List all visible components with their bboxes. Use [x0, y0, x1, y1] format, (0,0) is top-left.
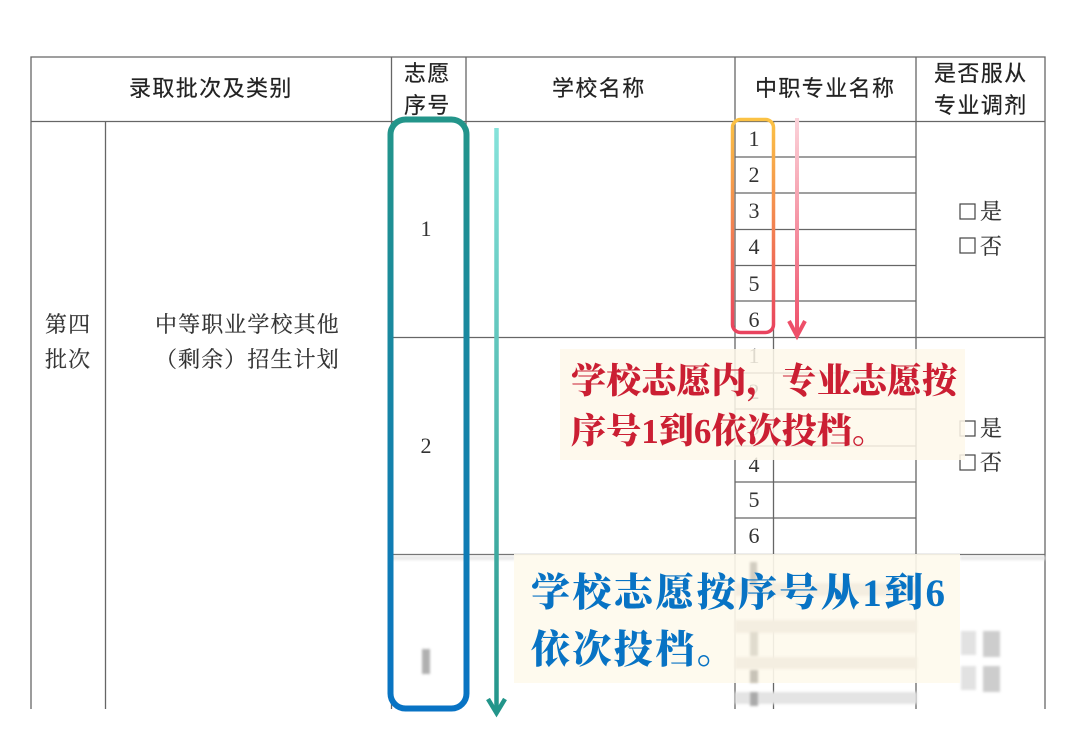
major numbers, school 2: 5 — [748, 487, 760, 512]
major numbers, school 2: 4 — [748, 452, 760, 477]
batch label: 批次 — [45, 347, 91, 372]
batch label: 第四 — [45, 312, 91, 337]
header: accept major adjustment: 专业调剂 — [934, 93, 1028, 118]
major numbers, school 1: 1 — [748, 126, 760, 151]
major numbers, school 2: 6 — [748, 523, 760, 548]
major numbers, school 1: 6 — [748, 307, 760, 332]
header: admission batch and category: 录取批次及类别 — [129, 76, 293, 101]
adjustment checkboxes, school 1 — [960, 199, 1002, 259]
faded table bands behind callout — [735, 562, 917, 683]
callout: school preference order — [514, 554, 960, 683]
major numbers, school 1: 2 — [748, 162, 760, 187]
header: vocational major name: 中职专业名称 — [755, 76, 895, 101]
header: school name: 学校名称 — [552, 76, 646, 101]
category label: （剩余）招生计划 — [155, 347, 340, 372]
major numbers, school 1: 3 — [748, 198, 760, 223]
blurred lower table rows — [391, 556, 1045, 706]
header: accept major adjustment: 是否服从 — [934, 61, 1028, 86]
header: preference number: 序号 — [404, 93, 451, 118]
arrow: school order — [488, 128, 505, 713]
header: accept major adjustment — [934, 61, 1028, 118]
callout: school preference order: 学校志愿按序号从1到6 — [531, 572, 947, 615]
adjustment checkboxes, school 1: 是 — [980, 199, 1002, 224]
school preference numbers: 2 — [420, 433, 432, 458]
school preference numbers: 1 — [420, 216, 432, 241]
major numbers, school 2: 3 — [748, 415, 760, 440]
major numbers, school 1: 5 — [748, 271, 760, 296]
header: preference number: 志愿 — [404, 61, 451, 86]
major numbers, school 2 — [748, 343, 760, 548]
adjustment checkboxes, school 1: 否 — [980, 234, 1002, 259]
callout: major preference order: 序号1到6依次投档。 — [571, 412, 887, 451]
school preference numbers — [420, 216, 432, 458]
callout: school preference order: 依次投档。 — [531, 629, 738, 672]
adjustment checkboxes, school 2 — [960, 416, 1002, 475]
major numbers, school 2: 2 — [748, 379, 760, 404]
adjustment checkboxes, school 2: 否 — [980, 450, 1002, 475]
header: preference number — [404, 61, 451, 118]
batch label — [45, 312, 91, 372]
major numbers, school 1: 4 — [748, 234, 760, 259]
highlight box: school preference column — [390, 120, 466, 708]
highlight box: major order column — [732, 120, 774, 332]
arrow: major order — [789, 118, 805, 336]
callout: major preference order: 学校志愿内，专业志愿按 — [571, 362, 960, 402]
major numbers, school 1 — [748, 126, 760, 332]
callout: major preference order — [560, 349, 965, 460]
category label — [155, 312, 340, 372]
adjustment checkboxes, school 2: 是 — [980, 416, 1002, 441]
category label: 中等职业学校其他 — [155, 312, 340, 337]
major numbers, school 2: 1 — [748, 343, 760, 368]
